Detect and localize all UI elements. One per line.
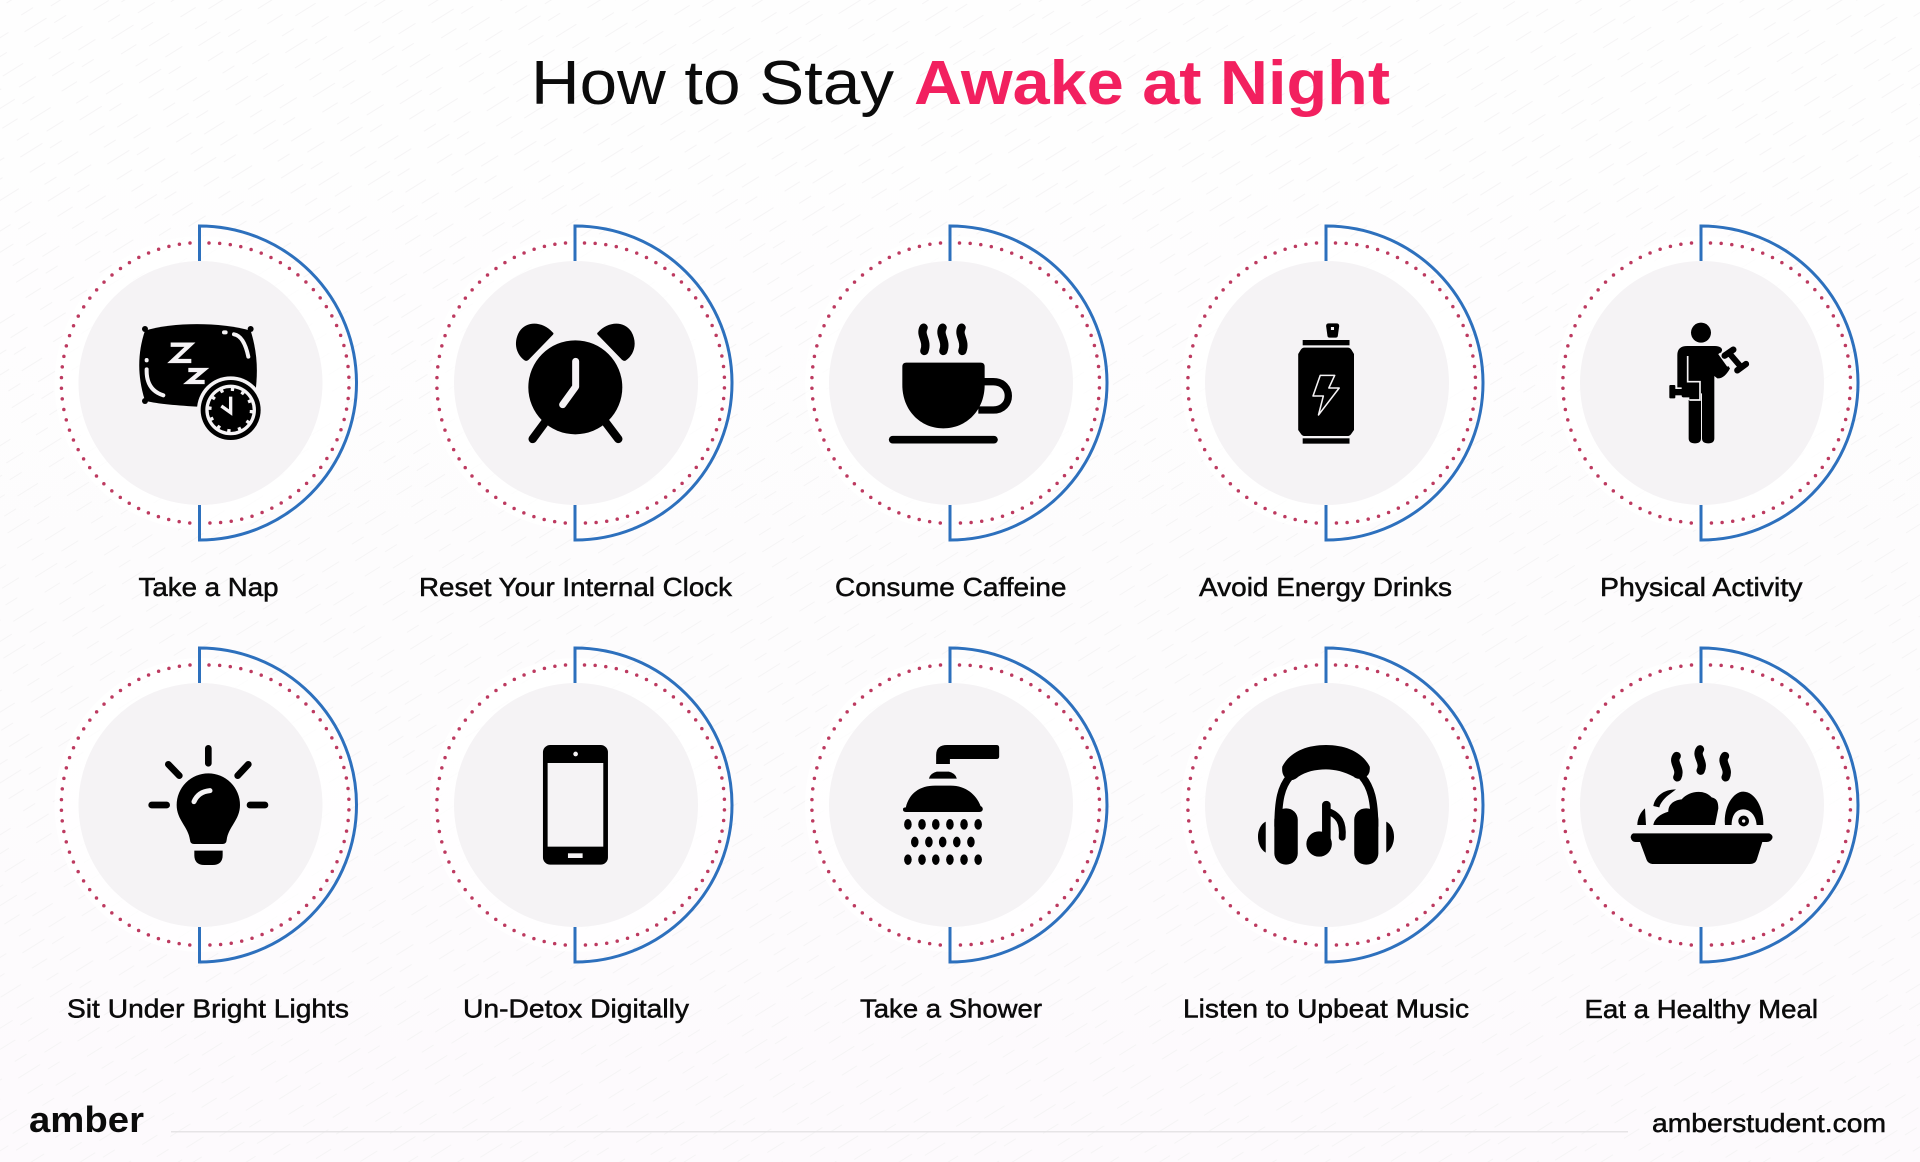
ring: Listen to Upbeat Music	[1181, 648, 1483, 962]
logo: amber: amber	[29, 1099, 144, 1140]
icon: headphones with music note	[1258, 745, 1394, 865]
label: Physical Activity: Physical Activity	[1600, 572, 1802, 602]
ring: Reset Your Internal Clock	[430, 226, 732, 540]
icon: smartphone	[543, 745, 608, 865]
ring: Eat a Healthy Meal	[1556, 648, 1858, 962]
panel: Take a Shower	[805, 648, 1107, 1024]
icon: coffee cup	[893, 328, 1008, 440]
panel: Reset Your Internal Clock	[419, 226, 733, 602]
label: Un-Detox Digitally: Un-Detox Digitally	[463, 994, 689, 1024]
ring: Un-Detox Digitally	[430, 648, 732, 962]
panel: Take a Nap	[54, 226, 356, 602]
footer	[29, 1099, 1886, 1140]
panel: Consume Caffeine	[805, 226, 1107, 602]
icon: pillow with clock	[139, 324, 264, 444]
icon: energy drink can	[1298, 323, 1354, 444]
icon: meal bowl	[1631, 749, 1773, 864]
label: Take a Shower: Take a Shower	[860, 994, 1042, 1024]
panel: Avoid Energy Drinks	[1181, 226, 1483, 602]
website: amberstudent.com	[1652, 1108, 1886, 1138]
panel: Listen to Upbeat Music	[1181, 648, 1483, 1024]
panel: Eat a Healthy Meal	[1556, 648, 1858, 1024]
title: How to Stay	[531, 49, 894, 118]
label: Listen to Upbeat Music: Listen to Upbeat Music	[1183, 994, 1469, 1024]
label: Avoid Energy Drinks: Avoid Energy Drinks	[1199, 572, 1452, 602]
title	[531, 49, 1390, 118]
label: Consume Caffeine: Consume Caffeine	[835, 572, 1066, 602]
panel: Un-Detox Digitally	[430, 648, 732, 1024]
ring: Physical Activity	[1556, 226, 1858, 540]
panel: Physical Activity	[1556, 226, 1858, 602]
label: Eat a Healthy Meal: Eat a Healthy Meal	[1584, 994, 1818, 1024]
ring: Avoid Energy Drinks	[1181, 226, 1483, 540]
title: Awake at Night	[914, 49, 1390, 118]
label: Reset Your Internal Clock: Reset Your Internal Clock	[419, 572, 733, 602]
icon: alarm clock	[516, 324, 635, 439]
icon: light bulb	[152, 748, 265, 865]
ring: Consume Caffeine	[805, 226, 1107, 540]
ring: Take a Shower	[805, 648, 1107, 962]
label: Take a Nap: Take a Nap	[138, 572, 278, 602]
ring: Sit Under Bright Lights	[54, 648, 356, 962]
icon: person lifting dumbbells	[1669, 323, 1746, 443]
ring: Take a Nap	[54, 226, 356, 540]
label: Sit Under Bright Lights: Sit Under Bright Lights	[67, 994, 349, 1024]
panel: Sit Under Bright Lights	[54, 648, 356, 1024]
icon: shower head	[903, 745, 999, 865]
